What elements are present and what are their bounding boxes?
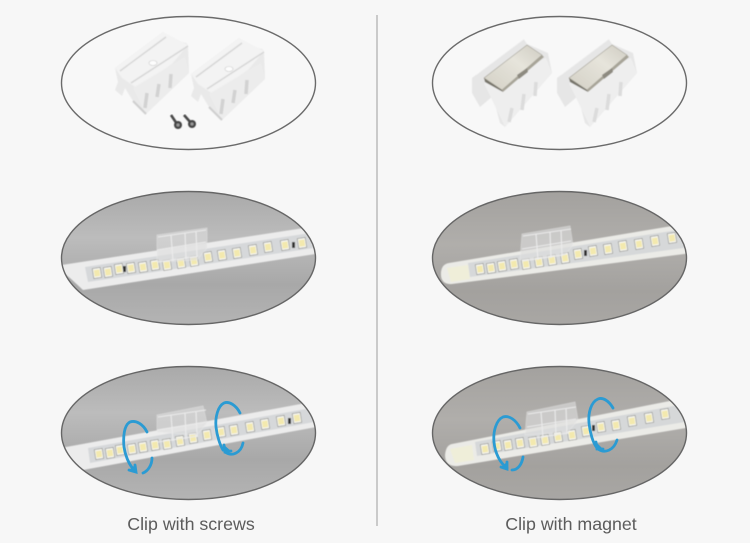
panel: clip with magnet, parts xyxy=(432,16,686,150)
photo: LED tube xyxy=(55,191,322,325)
arrow: left rotation xyxy=(494,417,523,470)
panel: magnet clip on LED tube xyxy=(432,191,692,325)
icon: two transparent clips xyxy=(115,32,265,120)
caption: clip with magnet: Clip with magnet xyxy=(505,514,637,534)
ellipse frame xyxy=(62,192,316,324)
photo: LED tube xyxy=(432,191,692,325)
panel: rotating screw clip xyxy=(55,366,322,500)
ellipse frame xyxy=(432,366,686,500)
ellipse frame xyxy=(62,16,316,150)
center divider xyxy=(376,15,378,526)
arrow: right rotation xyxy=(589,398,617,451)
caption: clip with screws: Clip with screws xyxy=(127,514,255,534)
arrow: left rotation xyxy=(124,421,152,473)
ellipse frame xyxy=(432,192,686,324)
icon: two screws xyxy=(171,115,196,129)
arrow: right rotation xyxy=(216,402,243,454)
photo: LED tube xyxy=(432,366,692,500)
ellipse frame xyxy=(62,366,316,500)
panel: screw clip on LED tube xyxy=(55,191,322,325)
panel: clip with screws, parts xyxy=(62,16,316,150)
ellipse frame xyxy=(432,16,686,150)
panel: rotating magnet clip xyxy=(432,366,692,500)
photo: LED tube xyxy=(55,366,322,500)
icon: two magnetic clips xyxy=(472,38,637,127)
